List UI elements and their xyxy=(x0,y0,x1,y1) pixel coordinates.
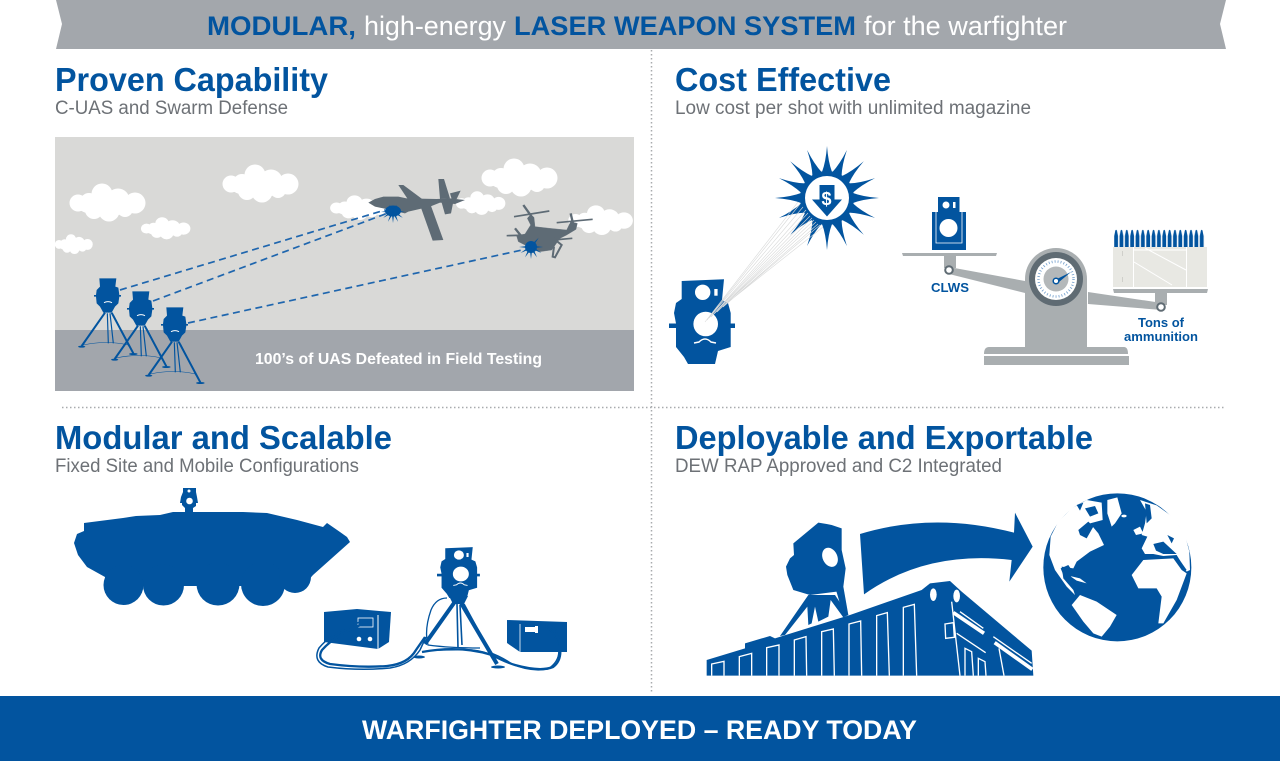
heading: Modular and Scalable: Modular and Scalable xyxy=(55,419,392,456)
ammunition crate xyxy=(1113,229,1207,287)
laser beams xyxy=(120,210,522,323)
heading: Cost Effective: Cost Effective xyxy=(675,61,891,98)
icon: armored vehicle with laser xyxy=(74,488,350,606)
subheading: low cost: Low cost per shot with unlimited magazine xyxy=(675,98,1031,119)
subheading: DEW RAP: DEW RAP Approved and C2 Integrated xyxy=(675,456,1002,477)
icon: tripod cables xyxy=(317,598,560,670)
banner title xyxy=(207,11,1067,41)
laser impact on quadcopter xyxy=(519,237,543,259)
scene caption: 100’s of UAS Defeated in Field Testing xyxy=(255,351,542,368)
banner title: MODULAR, xyxy=(207,11,356,41)
tilted laser on tripod xyxy=(780,523,848,636)
dollar sign: $ xyxy=(821,189,832,209)
panel: field testing scene xyxy=(55,137,634,391)
subheading: fixed site: Fixed Site and Mobile Configurations xyxy=(55,456,359,477)
icon: fixed-wing drone xyxy=(368,179,465,241)
icon: fixed-site power box right xyxy=(507,620,567,652)
banner title: for the warfighter xyxy=(864,11,1067,41)
label: Tons of ammunition: Tons of xyxy=(1138,315,1185,330)
label: Tons of ammunition xyxy=(1124,315,1198,344)
icon: globe xyxy=(1043,493,1191,641)
clouds xyxy=(55,158,633,254)
heading: Proven Capability: Proven Capability xyxy=(55,61,329,98)
laser impact on drone xyxy=(381,204,405,223)
subheading: C-UAS: C-UAS and Swarm Defense xyxy=(55,98,288,119)
icon: sunburst with dollar arrow xyxy=(775,146,879,250)
icon: shipping container with laser xyxy=(707,523,1033,676)
icon: CLWS on scale xyxy=(932,197,966,250)
label: CLWS: CLWS xyxy=(931,280,969,295)
icon: quadcopter xyxy=(507,205,593,257)
icon: laser tripods xyxy=(78,278,205,384)
arrow: export xyxy=(860,513,1033,594)
footer banner xyxy=(0,696,1280,761)
laser beam to sunburst xyxy=(705,202,823,322)
icon: fixed-site tripod laser xyxy=(413,547,505,668)
banner title: high-energy xyxy=(364,11,507,41)
icon: fixed-site power box left xyxy=(324,609,391,649)
header banner xyxy=(56,0,1226,49)
footer banner: WARFIGHTER DEPLOYED – READY TODAY xyxy=(362,715,917,745)
label: Tons of ammunition: ammunition xyxy=(1124,329,1198,344)
heading: Deployable and Exportable: Deployable and Exportable xyxy=(675,419,1093,456)
banner title: LASER WEAPON SYSTEM xyxy=(514,11,856,41)
icon: CLWS laser unit xyxy=(669,279,735,364)
icon: balance scale xyxy=(902,197,1208,365)
